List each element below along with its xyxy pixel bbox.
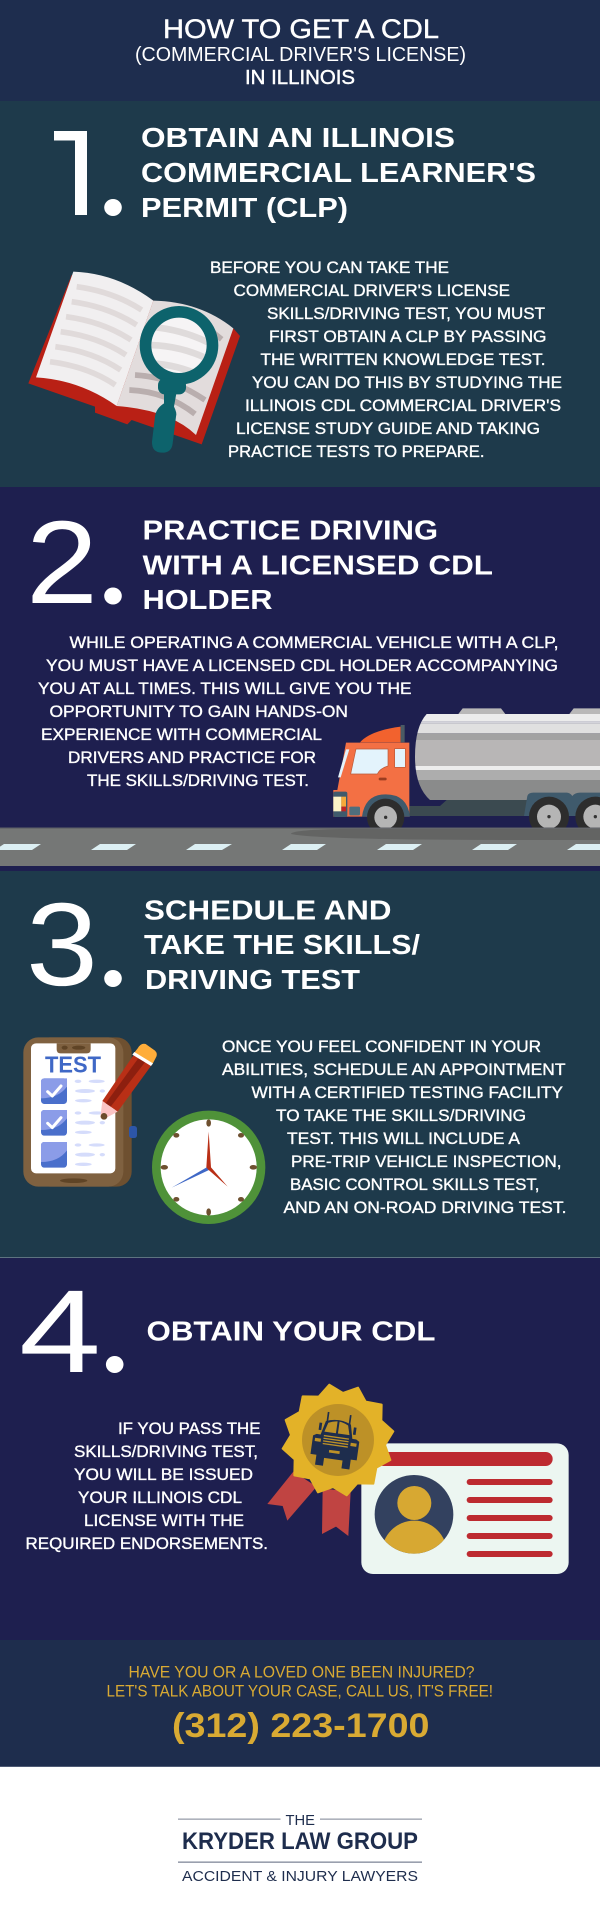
heading step 1: COMMERCIAL LEARNER'S: [141, 157, 536, 188]
heading step 1: [141, 122, 536, 223]
heading step 1: OBTAIN AN ILLINOIS: [141, 122, 455, 153]
body text step 4: IF YOU PASS THE: [118, 1420, 260, 1438]
icon: test clipboard with pencil: [23, 1037, 157, 1187]
panel: step 3: [0, 871, 600, 1258]
body text step 2: WHILE OPERATING A COMMERCIAL VEHICLE WITH A CLP,: [70, 634, 558, 652]
icon: test clipboard with pencil: TEST: [45, 1052, 101, 1078]
step number 3: 3: [26, 879, 98, 1011]
step number 4: 4: [19, 1266, 101, 1398]
body text step 3: [222, 1038, 566, 1217]
body text step 3: ABILITIES, SCHEDULE AN APPOINTMENT: [222, 1061, 566, 1079]
body text step 2: THE SKILLS/DRIVING TEST.: [87, 772, 309, 790]
body text step 3: BASIC CONTROL SKILLS TEST,: [290, 1176, 540, 1194]
callout invitation: LET'S TALK ABOUT YOUR CASE, CALL US, IT'S FREE!: [106, 1682, 493, 1700]
body text step 3: TO TAKE THE SKILLS/DRIVING: [276, 1107, 526, 1125]
body text step 4: SKILLS/DRIVING TEST,: [74, 1443, 258, 1461]
body text step 4: [26, 1420, 268, 1553]
body text step 1: SKILLS/DRIVING TEST, YOU MUST: [267, 305, 545, 323]
heading step 2: [142, 514, 493, 615]
body text step 1: BEFORE YOU CAN TAKE THE: [210, 259, 449, 277]
body text step 2: OPPORTUNITY TO GAIN HANDS-ON: [50, 703, 348, 721]
title: HOW TO GET A CDL: [163, 14, 439, 44]
icon: license card: [361, 1443, 569, 1586]
heading step 2: HOLDER: [142, 584, 272, 615]
icon: award ribbon badge: [267, 1385, 393, 1536]
step number 3: [26, 879, 122, 1011]
panel: call to action: [0, 1640, 600, 1767]
body text step 2: YOU MUST HAVE A LICENSED CDL HOLDER ACCOMPANYING: [46, 657, 558, 675]
body text step 4: YOUR ILLINOIS CDL: [78, 1489, 242, 1507]
body text step 2: [38, 634, 558, 790]
step number 1: [54, 131, 122, 216]
body text step 1: THE WRITTEN KNOWLEDGE TEST.: [260, 351, 546, 369]
logo: Kryder Law Group: ACCIDENT & INJURY LAWYERS: [182, 1868, 418, 1885]
body text step 4: YOU WILL BE ISSUED: [74, 1466, 253, 1484]
body text step 1: FIRST OBTAIN A CLP BY PASSING: [269, 328, 546, 346]
logo: Kryder Law Group: THE: [286, 1812, 315, 1829]
logo: Kryder Law Group: [178, 1812, 422, 1885]
body text step 1: ILLINOIS CDL COMMERCIAL DRIVER'S: [245, 397, 561, 415]
header panel: [0, 0, 600, 101]
icon: clock: [152, 1111, 265, 1224]
logo: Kryder Law Group: KRYDER LAW GROUP: [182, 1828, 418, 1855]
body text step 4: LICENSE WITH THE: [84, 1512, 244, 1530]
heading step 3: DRIVING TEST: [145, 964, 360, 995]
footer panel with logo: [0, 1767, 600, 1930]
road: [0, 828, 600, 866]
icon: tanker truck: [333, 708, 600, 837]
heading step 3: TAKE THE SKILLS/: [144, 929, 420, 960]
body text step 3: WITH A CERTIFIED TESTING FACILITY: [252, 1084, 563, 1102]
body text step 1: LICENSE STUDY GUIDE AND TAKING: [236, 420, 540, 438]
body text step 3: ONCE YOU FEEL CONFIDENT IN YOUR: [222, 1038, 541, 1056]
heading step 4: OBTAIN YOUR CDL: [146, 1316, 436, 1346]
step number 2: [26, 497, 122, 629]
panel: step 2: [0, 487, 600, 871]
body text step 4: REQUIRED ENDORSEMENTS.: [26, 1535, 268, 1553]
heading step 3: [144, 894, 420, 995]
body text step 2: EXPERIENCE WITH COMMERCIAL: [41, 726, 322, 744]
heading step 2: WITH A LICENSED CDL: [142, 550, 493, 580]
phone number: (312) 223-1700: [172, 1707, 430, 1745]
step number 4: [19, 1266, 123, 1398]
heading step 2: PRACTICE DRIVING: [142, 514, 438, 546]
panel: step 1: [0, 101, 600, 487]
body text step 1: YOU CAN DO THIS BY STUDYING THE: [252, 374, 562, 392]
body text step 2: DRIVERS AND PRACTICE FOR: [68, 749, 316, 767]
body text step 3: AND AN ON-ROAD DRIVING TEST.: [284, 1199, 566, 1217]
icon: truck front: [309, 1410, 363, 1470]
body text step 3: TEST. THIS WILL INCLUDE A: [287, 1130, 520, 1148]
body text step 1: PRACTICE TESTS TO PREPARE.: [228, 443, 484, 461]
body text step 1: COMMERCIAL DRIVER'S LICENSE: [234, 282, 510, 300]
location line: IN ILLINOIS: [245, 67, 355, 89]
icon: book with magnifier: [28, 272, 240, 453]
subtitle: (COMMERCIAL DRIVER'S LICENSE): [135, 43, 466, 66]
body text step 2: YOU AT ALL TIMES. THIS WILL GIVE YOU THE: [38, 680, 412, 698]
step number 1: 1: [40, 109, 116, 241]
panel: step 4: [0, 1258, 600, 1640]
body text step 1: [210, 259, 562, 461]
step number 2: 2: [26, 497, 98, 629]
callout question: HAVE YOU OR A LOVED ONE BEEN INJURED?: [128, 1664, 474, 1682]
heading step 1: PERMIT (CLP): [141, 192, 348, 223]
body text step 3: PRE-TRIP VEHICLE INSPECTION,: [291, 1153, 562, 1171]
heading step 3: SCHEDULE AND: [144, 894, 392, 926]
